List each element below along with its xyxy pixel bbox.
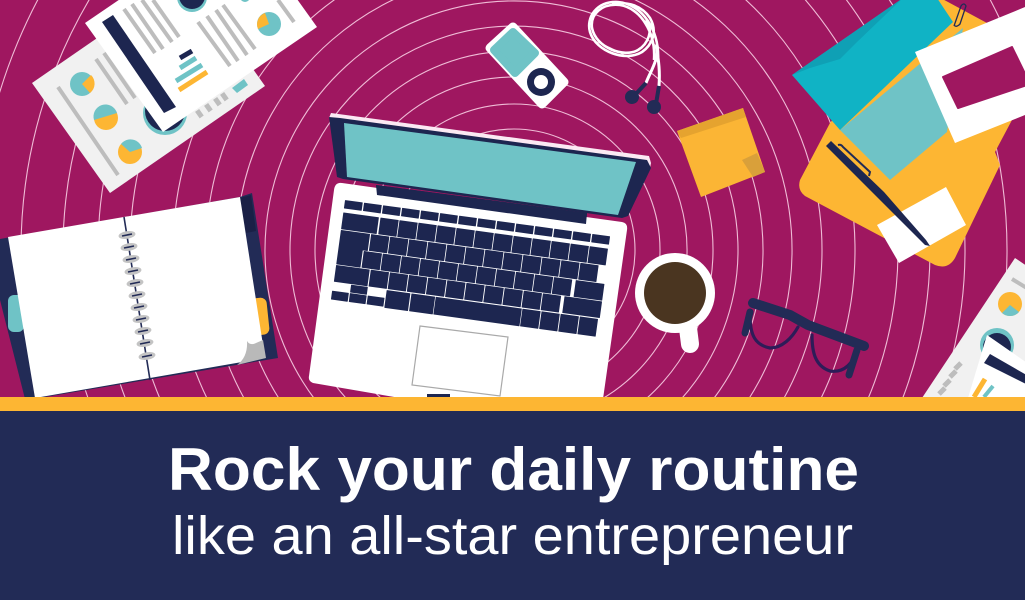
folder with envelopes and pen [792,0,1025,266]
coffee cup [635,253,715,344]
documents: bottom right [922,258,1025,398]
documents: top left [32,0,317,193]
title: Rock your daily routine [168,436,859,503]
keyboard [331,200,610,336]
sticky note [677,108,765,197]
notebook [0,193,278,399]
glasses [745,303,864,375]
banner footer [0,397,1025,600]
earphones [589,2,661,114]
laptop lid [329,113,651,218]
white envelope [915,5,1025,143]
trackpad [412,326,508,396]
pen [826,141,930,246]
spiral binding [118,230,156,361]
subtitle: like an all-star entrepreneur [172,506,853,566]
page curl [237,340,266,365]
laptop [309,113,651,399]
paperclip [954,4,966,26]
music player [490,27,564,104]
